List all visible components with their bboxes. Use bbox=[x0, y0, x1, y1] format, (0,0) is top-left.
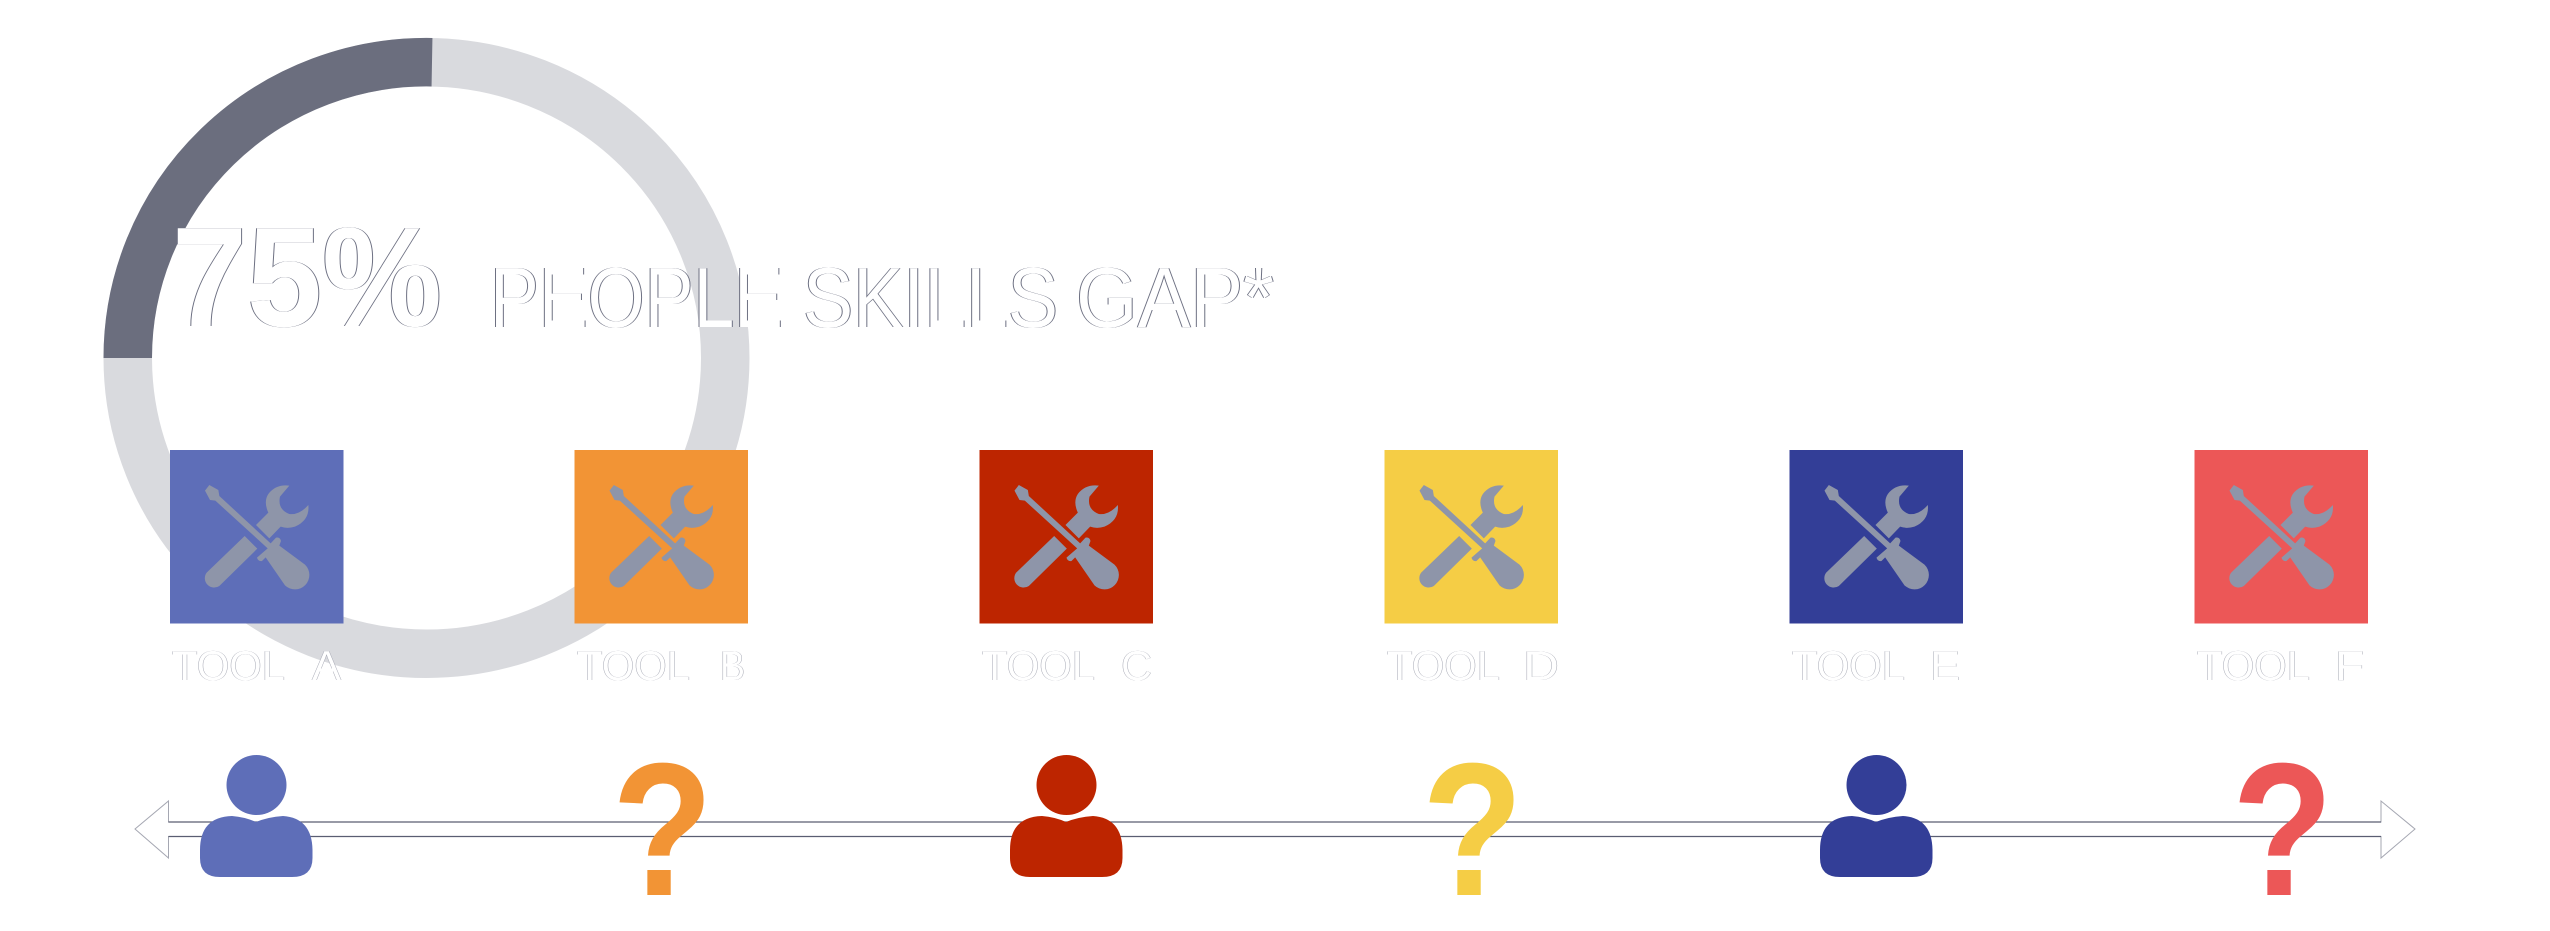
arrow: double-headed timeline bbox=[135, 801, 2415, 858]
heading: people skills gap: SKILLS bbox=[803, 251, 1058, 346]
tool card C bbox=[980, 450, 1153, 624]
label: tool D bbox=[1387, 642, 1559, 689]
label: tool F bbox=[2197, 642, 2364, 689]
label: tool A bbox=[172, 642, 341, 689]
label: tool C: TOOL bbox=[982, 642, 1095, 689]
tool card A bbox=[170, 450, 344, 624]
label: tool A: TOOL bbox=[172, 642, 285, 689]
label: tool D: TOOL bbox=[1387, 642, 1500, 689]
label: tool B bbox=[577, 642, 745, 689]
icon: question mark D: ? bbox=[1422, 723, 1523, 931]
label: tool A: A bbox=[312, 642, 341, 689]
donut highlighted arc bbox=[128, 62, 432, 358]
icon: person C bbox=[1010, 755, 1122, 877]
icon: question mark B: ? bbox=[612, 723, 713, 931]
tool card D bbox=[1384, 450, 1558, 624]
tool card B bbox=[574, 450, 748, 624]
icon: crossed tools D bbox=[1419, 485, 1524, 589]
label: tool E: TOOL bbox=[1792, 642, 1905, 689]
icon: crossed tools A bbox=[205, 485, 309, 589]
tool card F bbox=[2194, 450, 2368, 624]
label: tool E bbox=[1792, 642, 1960, 689]
label: tool F: TOOL bbox=[2197, 642, 2310, 689]
label: tool B: TOOL bbox=[577, 642, 690, 689]
icon: person A bbox=[200, 755, 312, 877]
label: tool F: F bbox=[2335, 642, 2364, 689]
icon: person E bbox=[1820, 755, 1932, 877]
icon: crossed tools C bbox=[1014, 485, 1119, 589]
icon: crossed tools F bbox=[2229, 485, 2334, 589]
label: tool B: B bbox=[720, 642, 745, 689]
heading: people skills gap: PEOPLE bbox=[490, 251, 783, 346]
icon: crossed tools E bbox=[1824, 485, 1929, 589]
label: tool C bbox=[982, 642, 1152, 689]
icon: crossed tools B bbox=[609, 485, 714, 589]
label: tool E: E bbox=[1930, 642, 1960, 689]
heading: people skills gap bbox=[490, 251, 1274, 346]
donut chart: 75% ring bbox=[128, 62, 725, 654]
heading: 75% figure: 75% bbox=[172, 198, 442, 357]
label: tool C: C bbox=[1121, 642, 1152, 689]
icon: question mark F: ? bbox=[2232, 723, 2333, 931]
label: tool D: D bbox=[1523, 642, 1559, 689]
heading: people skills gap: GAP* bbox=[1076, 251, 1274, 346]
tool card E bbox=[1790, 450, 1963, 624]
